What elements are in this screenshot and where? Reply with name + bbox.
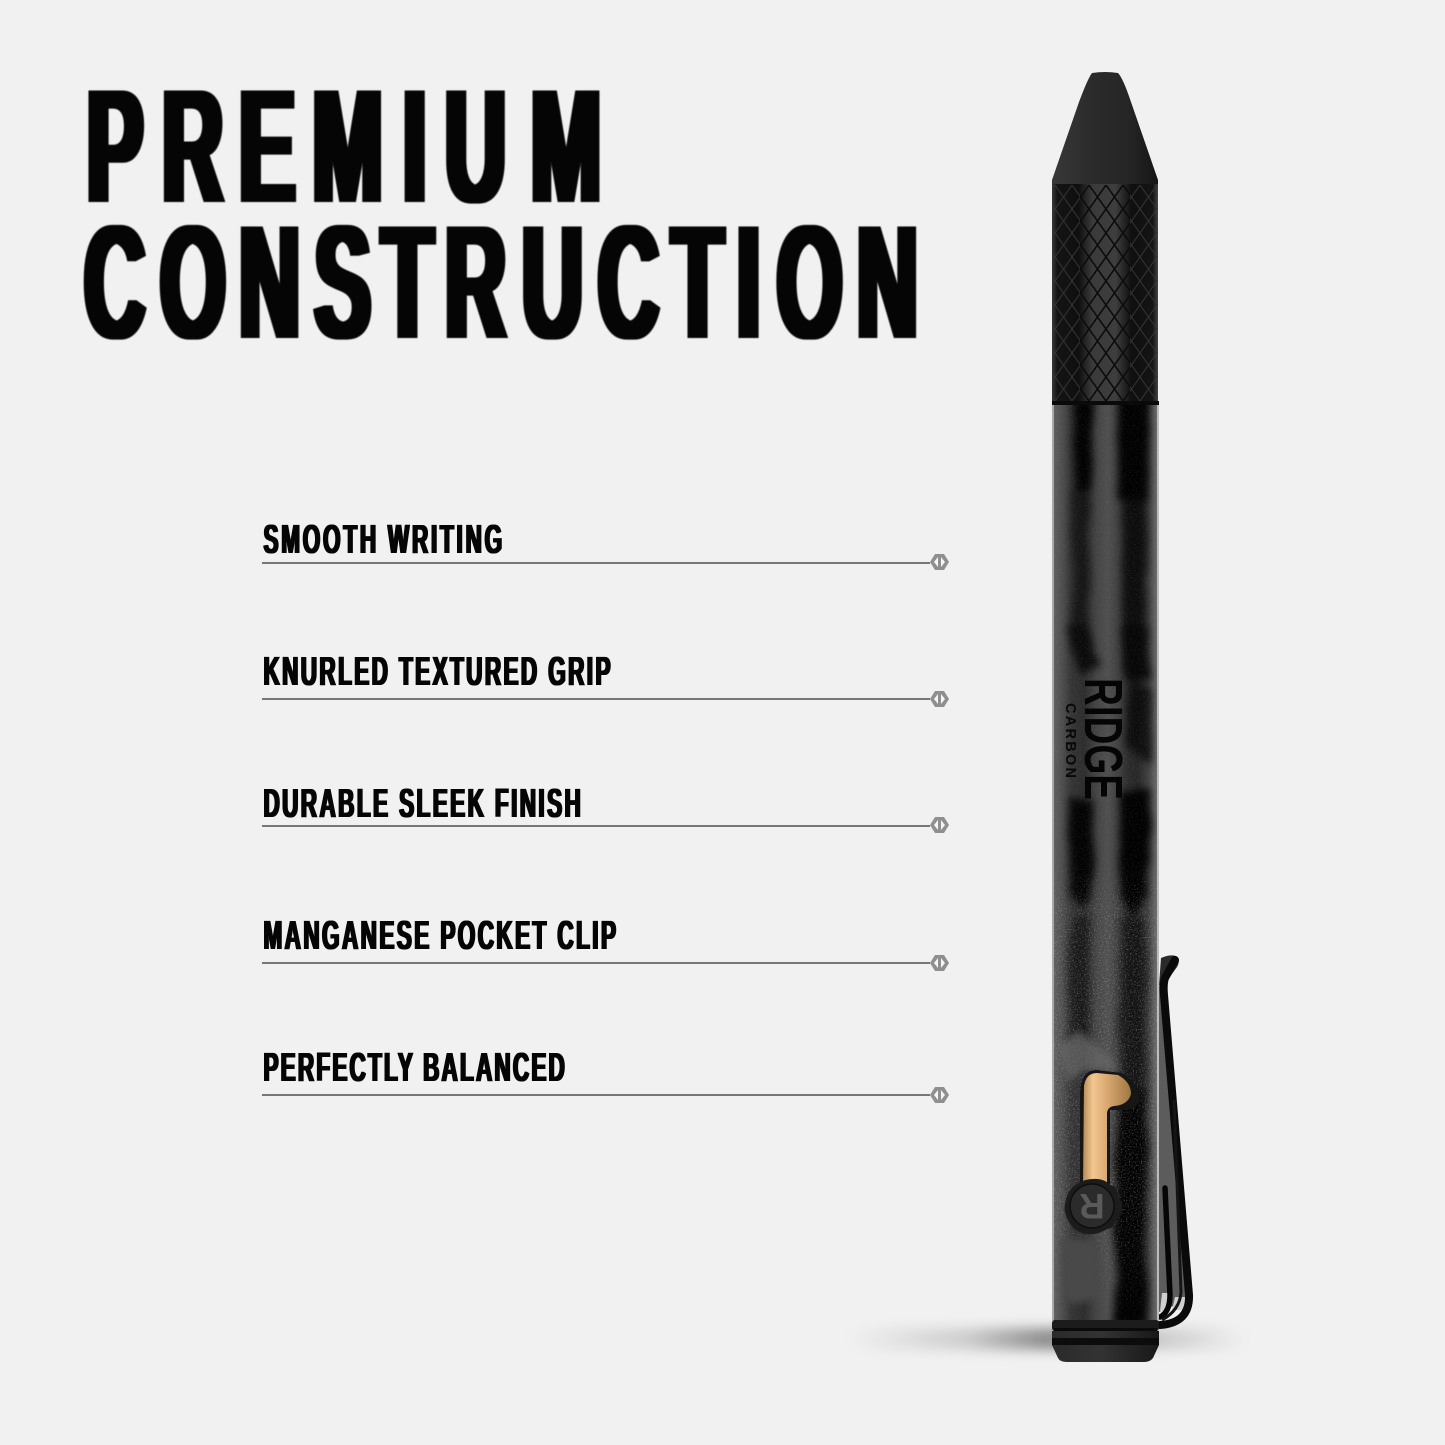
base cap <box>1052 1320 1159 1362</box>
brass bolt slot <box>1080 1070 1139 1186</box>
logo: RIDGE CARBON <box>1062 678 1133 800</box>
callout: smooth writing: SMOOTH WRITING <box>263 517 502 563</box>
logo: RIDGE CARBON: CARBON <box>1062 703 1078 778</box>
carbon fibre barrel <box>1052 395 1159 1325</box>
bolt knob <box>1065 1179 1122 1234</box>
pen tip cone <box>1052 72 1158 186</box>
callout: smooth writing <box>262 517 949 570</box>
title <box>84 56 918 373</box>
callout: manganese pocket clip: MANGANESE POCKET CLIP <box>263 913 616 959</box>
knurled grip <box>1052 184 1158 402</box>
pocket clip <box>1159 955 1189 1325</box>
callout: knurled textured grip: KNURLED TEXTURED GRIP <box>263 649 611 695</box>
callout: durable sleek finish <box>262 781 949 833</box>
callout: knurled textured grip <box>262 649 949 707</box>
title: PREMIUM <box>87 56 601 237</box>
bolt knob: R <box>1079 1186 1105 1225</box>
pen <box>1052 72 1189 1362</box>
callout: durable sleek finish: DURABLE SLEEK FINISH <box>263 781 581 827</box>
callout: perfectly balanced: PERFECTLY BALANCED <box>263 1045 565 1091</box>
callout: manganese pocket clip <box>262 913 949 971</box>
logo: RIDGE CARBON: RIDGE <box>1073 678 1133 800</box>
floor shadow <box>850 1328 1245 1350</box>
callout: perfectly balanced <box>262 1045 949 1103</box>
title: CONSTRUCTION <box>84 192 918 373</box>
